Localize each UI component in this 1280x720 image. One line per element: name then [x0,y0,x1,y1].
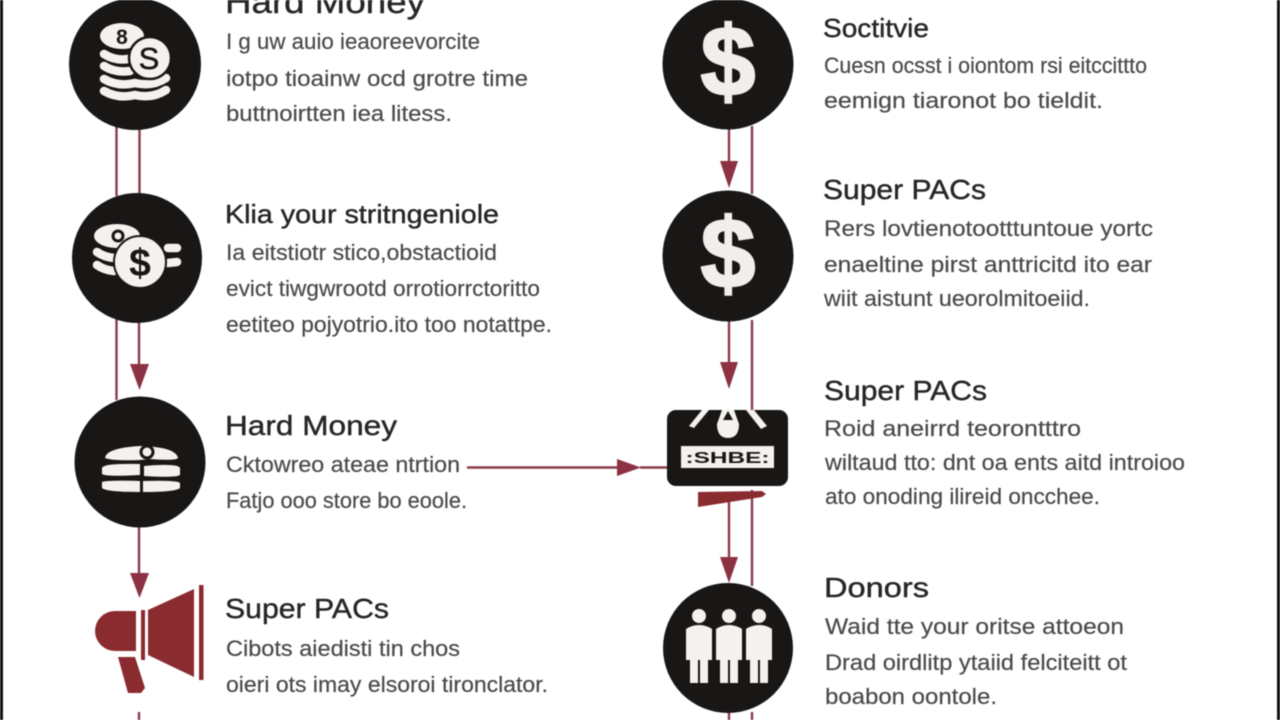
text block: Super PACs left: Super PACs [225,593,389,624]
icon: dollar circle top: $ [701,6,755,116]
text block: Super PACs left: Cibots aiedisti tin chos [226,636,460,661]
icon: dollar circle middle [662,190,794,322]
icon: coin stack with coin [69,0,201,130]
icon: dollar circle middle: $ [701,198,755,308]
text block: Super PACs right two [824,375,1185,509]
text block: Super PACs left: oieri ots imay elsoroi tironclator. [226,672,548,697]
icon: ballot box: :SHBE: [686,450,770,467]
red wedge below ballot box [698,491,766,507]
text block: Super PACs right one: Rers lovtienotootttuntoue yortc [824,216,1153,241]
text block: Hard Money lower [225,410,467,513]
text block: Donors: boabon oontole. [825,684,997,709]
icon: dollar circle top [662,0,794,130]
text block: second left: Klia your stritngeniole [225,199,499,229]
text block: Hard Money lower: Hard Money [225,410,397,441]
icon: coins with dollar sign: $ [129,242,151,285]
text block: Donors [824,572,1127,709]
text block: second left: evict tiwgwrootd orrotiorrctoritto [226,276,540,301]
text block: Hard Money lower: Cktowreo ateae ntrtion [226,452,460,477]
text block: Super PACs right one: wiit aistunt ueorolmitoeiid. [823,286,1090,311]
text block: Super PACs right two: Super PACs [824,375,987,406]
text block: Hard Money lower: Fatjo ooo store bo eoole. [226,488,467,513]
text block: Hard Money top: I g uw auio ieaoreevorcite [226,29,480,54]
icon: donors group [663,583,793,713]
arrow: Hard Money to Super PACs box [467,459,668,476]
text block: Hard Money top: iotpo tioainw ocd grotre time [226,66,528,91]
text block: second left: eetiteo pojyotrio.ito too notattpe. [226,312,552,337]
text block: Super PACs right two: Roid aneirrd teorontttro [824,416,1081,441]
text block: Soctitvie: eemign tiaronot bo tieldit. [824,88,1103,113]
text block: Super PACs right two: wiltaud tto: dnt oa ents aitd introioo [824,450,1185,475]
icon: coin stack with coin: 8 [116,26,128,49]
text block: Super PACs left [225,593,548,697]
icon: coins with dollar sign [72,193,202,323]
icon: coin stack with coin: S [139,41,159,76]
text block: Donors: Donors [824,572,929,603]
text block: Soctitvie: Soctitvie [823,13,929,43]
connector lines and arrows: right column [720,126,752,720]
text block: Hard Money top: buttnoirtten iea litess. [226,101,452,126]
text block: Super PACs right one: Super PACs [823,174,986,205]
text block: Super PACs right one [823,174,1153,311]
connector lines and arrows: left column [116,126,149,720]
icon: flat coin stack [74,396,206,528]
text block: Soctitvie [823,13,1147,113]
text block: Donors: Drad oirdlitp ytaiid felciteitt ot [825,650,1127,675]
text block: Donors: Waid tte your oritse attoeon [825,614,1124,639]
text block: Super PACs right one: enaeltine pirst anttricitd ito ear [824,252,1152,277]
text block: second left [225,199,552,337]
text block: second left: Ia eitstiotr stico,obstactioid [226,240,497,265]
text block: Hard Money top [225,0,528,126]
text block: Super PACs right two: ato onoding ilireid oncchee. [825,484,1100,509]
icon: megaphone [95,585,204,693]
text block: Soctitvie: Cuesn ocsst i oiontom rsi eitccittto [824,53,1147,78]
icon: ballot box [667,410,788,486]
